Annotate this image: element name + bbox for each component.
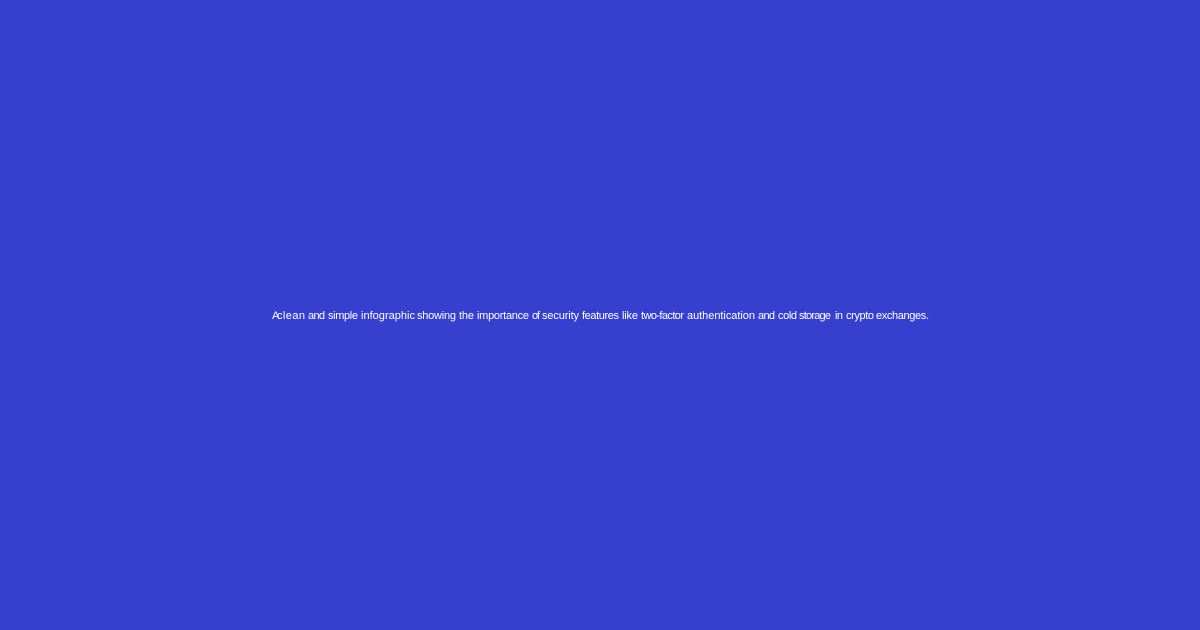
text block: centered description: in (835, 310, 843, 322)
text block: centered description: storage (799, 310, 831, 322)
text block: centered description: features (582, 310, 620, 322)
text block: centered description: the (459, 310, 474, 322)
text block: centered description: two-factor (641, 310, 684, 322)
text block: centered description: authentication (687, 310, 755, 322)
text block: centered description: infographic (361, 310, 416, 322)
text block: centered description: A (272, 310, 280, 322)
text block: centered description: cold (778, 310, 797, 322)
text block: centered description (272, 310, 929, 322)
text block: centered description: like (622, 310, 638, 322)
text block: centered description: crypto (846, 310, 874, 322)
text block: centered description: and (308, 310, 325, 322)
text block: centered description: of (532, 310, 541, 322)
text block: centered description: and (758, 310, 775, 322)
text block: centered description: showing (417, 310, 456, 322)
text block: centered description: security (542, 310, 580, 322)
text block: centered description: importance (477, 310, 529, 322)
text block: centered description: simple (328, 310, 358, 322)
text block: centered description: clean (277, 310, 305, 322)
text block: centered description: exchanges. (876, 310, 929, 322)
